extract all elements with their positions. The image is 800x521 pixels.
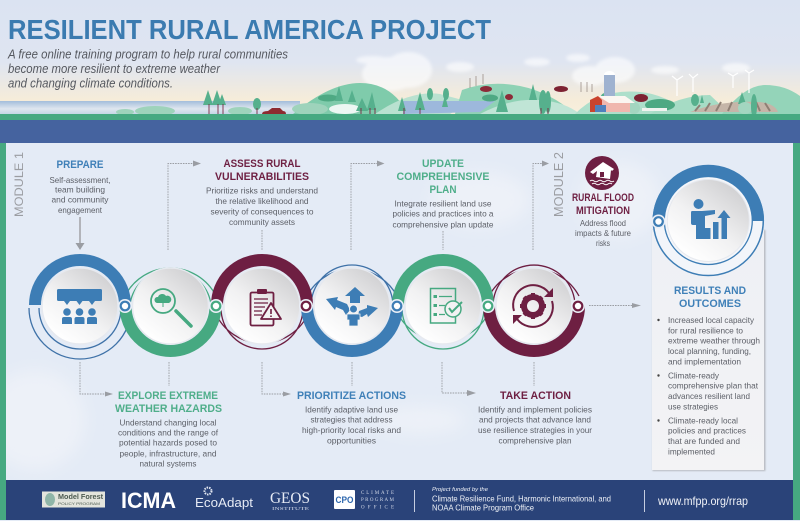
- results bullet list: extreme weather through: [668, 336, 760, 346]
- landscape illustration: [0, 52, 800, 118]
- step text: prioritize actions: high-priority local risks and: [302, 425, 401, 435]
- trees: [203, 84, 757, 118]
- step text: explore extreme weather hazards: WEATHER HAZARDS: [115, 403, 222, 415]
- website url: www.mfpp.org/rrap: [657, 494, 748, 508]
- step text: explore extreme weather hazards: conditions and the range of: [118, 427, 219, 437]
- logo: icma: ICMA: [121, 488, 176, 513]
- blue band: [0, 120, 800, 143]
- results bullet list: [657, 315, 760, 456]
- icon: flooded house: [585, 156, 619, 190]
- logo: climate program office: PROGRAM: [361, 498, 395, 503]
- step text: prepare: team building: [55, 184, 105, 194]
- logo: model forest: Model Forest: [58, 494, 104, 501]
- step text: prioritize actions: Identify adaptive land use: [305, 404, 398, 414]
- logo: geos institute: GEOS: [270, 490, 310, 507]
- results bullet list: comprehensive plan that: [668, 381, 759, 391]
- step text: assess rural vulnerabilities: severity of consequences to: [210, 206, 314, 216]
- logo: climate program office: [334, 490, 395, 510]
- step text: rural flood mitigation: RURAL FLOOD: [572, 192, 634, 204]
- logo: climate program office: CPO: [336, 495, 354, 505]
- results heading: OUTCOMES: [679, 298, 741, 310]
- step text: prepare: [50, 159, 110, 215]
- funding credit: [432, 487, 611, 512]
- step text: update comprehensive plan: COMPREHENSIVE: [396, 171, 490, 183]
- step text: take action: and projects that advance land: [479, 415, 591, 425]
- step text: take action: use resilience strategies in your: [478, 425, 592, 435]
- step text: explore extreme weather hazards: [115, 390, 222, 468]
- logo: climate program office: OFFICE: [361, 506, 394, 510]
- step text: prioritize actions: [297, 390, 406, 445]
- step text: update comprehensive plan: UPDATE: [422, 158, 464, 170]
- right green side strip: [793, 143, 800, 520]
- step text: assess rural vulnerabilities: ASSESS RURAL: [224, 158, 301, 170]
- step text: explore extreme weather hazards: potential hazards posed to: [119, 438, 217, 448]
- icon: checklist: [430, 288, 462, 323]
- silo: [604, 75, 615, 96]
- results bullet list: local planning, funding,: [668, 346, 751, 356]
- step text: prioritize actions: PRIORITIZE ACTIONS: [297, 390, 406, 402]
- icon: team meeting: [57, 289, 102, 324]
- icon: magnifier with storm cloud: [151, 289, 191, 326]
- step text: explore extreme weather hazards: Understand changing local: [120, 417, 217, 427]
- step text: take action: TAKE ACTION: [500, 390, 571, 402]
- step text: explore extreme weather hazards: natural systems: [140, 458, 196, 468]
- step text: prepare: engagement: [58, 205, 103, 215]
- step text: assess rural vulnerabilities: the relative likelihood and: [216, 196, 309, 206]
- label: module 1: MODULE 1: [14, 152, 26, 217]
- barn: [590, 96, 630, 112]
- logo: model forest: [42, 492, 105, 508]
- results bullet list: policies and practices: [668, 426, 746, 436]
- red shrubs: [480, 86, 492, 92]
- results bullet list: and implementation: [668, 356, 741, 366]
- results bullet list: implemented: [668, 446, 715, 456]
- subtitle: [7, 46, 288, 90]
- step text: assess rural vulnerabilities: [206, 158, 318, 227]
- process ring chain: [29, 260, 585, 359]
- label: module 2: MODULE 2: [551, 152, 566, 217]
- funding credit: Project funded by the: [432, 487, 488, 493]
- red car: [262, 108, 286, 114]
- discs: [42, 268, 572, 344]
- logo: ecoadapt: EcoAdapt: [195, 495, 253, 510]
- step text: update comprehensive plan: Integrate resilient land use: [394, 198, 492, 208]
- panel: results and outcomes: [652, 166, 766, 471]
- results bullet list: use strategies: [668, 401, 718, 411]
- step text: update comprehensive plan: comprehensive plan update: [392, 220, 494, 230]
- arrows: connectors between steps: [76, 160, 641, 396]
- title: RESILIENT RURAL AMERICA PROJECT: [8, 14, 491, 45]
- results bullet list: that are funded and: [668, 436, 740, 446]
- step text: prioritize actions: opportunities: [327, 435, 376, 445]
- results bullet list: for rural resilience to: [668, 325, 743, 335]
- step text: take action: Identify and implement policies: [478, 404, 592, 414]
- step text: prepare: Self-assessment,: [50, 175, 110, 185]
- step text: rural flood mitigation: impacts & future: [575, 228, 631, 238]
- results ring: [652, 166, 763, 276]
- step text: prepare: PREPARE: [56, 159, 104, 171]
- icon: gear with cycle arrows: [513, 285, 553, 327]
- icon: person at crossroads: [326, 287, 378, 326]
- step text: assess rural vulnerabilities: community assets: [229, 217, 295, 227]
- thin rings: [29, 265, 579, 359]
- step text: prioritize actions: strategies that address: [310, 415, 392, 425]
- step text: rural flood mitigation: [572, 192, 634, 248]
- step text: prepare: and community: [52, 194, 109, 204]
- background sky: [0, 0, 800, 114]
- step text: assess rural vulnerabilities: VULNERABILITIES: [215, 171, 309, 183]
- thick arcs: [35, 260, 579, 351]
- wind turbines: [672, 70, 754, 96]
- water: [0, 101, 300, 114]
- step text: update comprehensive plan: PLAN: [430, 184, 457, 196]
- soft background clouds: [0, 162, 660, 470]
- subtitle: A free online training program to help rural communities: [7, 46, 288, 62]
- logo: geos institute: INSTITUTE: [272, 506, 309, 511]
- step text: explore extreme weather hazards: people, infrastructure, and: [120, 448, 217, 458]
- hills: [293, 83, 408, 114]
- funding credit: NOAA Climate Program Office: [432, 502, 534, 512]
- ground strip: [0, 114, 800, 120]
- step text: explore extreme weather hazards: EXPLORE EXTREME: [118, 390, 218, 402]
- step text: rural flood mitigation: Address flood: [580, 218, 626, 228]
- step text: rural flood mitigation: risks: [596, 238, 610, 248]
- connector nodes: [118, 299, 585, 313]
- logo: model forest: POLICY PROGRAM: [58, 501, 100, 506]
- results bullet list: Climate-ready: [668, 370, 720, 380]
- step text: rural flood mitigation: MITIGATION: [576, 205, 630, 217]
- clouds: [356, 52, 750, 91]
- step text: assess rural vulnerabilities: Prioritize risks and understand: [206, 186, 318, 196]
- results bullet list: advances resilient land: [668, 391, 750, 401]
- main panel background: [0, 143, 800, 521]
- step text: update comprehensive plan: policies and practices into a: [392, 208, 494, 218]
- results heading: [674, 285, 746, 310]
- step text: update comprehensive plan: [392, 158, 494, 230]
- icon: clipboard with warning: [250, 289, 281, 326]
- results heading: RESULTS AND: [674, 285, 746, 297]
- logo: climate program office: CLIMATE: [361, 491, 394, 496]
- funding credit: Climate Resilience Fund, Harmonic International, and: [432, 494, 611, 504]
- logo: ecoadapt: [195, 488, 253, 510]
- results bullet list: Increased local capacity: [668, 315, 755, 325]
- subtitle: become more resilient to extreme weather: [8, 61, 221, 76]
- step text: take action: [478, 390, 592, 445]
- icon: presenter with rising bars: [691, 199, 730, 239]
- low bushes: [116, 103, 328, 116]
- step text: take action: comprehensive plan: [498, 435, 572, 445]
- footer bar: [6, 480, 793, 520]
- results bullet list: Climate-ready local: [668, 415, 738, 425]
- subtitle: and changing climate conditions.: [8, 76, 173, 90]
- left green side strip: [0, 143, 6, 520]
